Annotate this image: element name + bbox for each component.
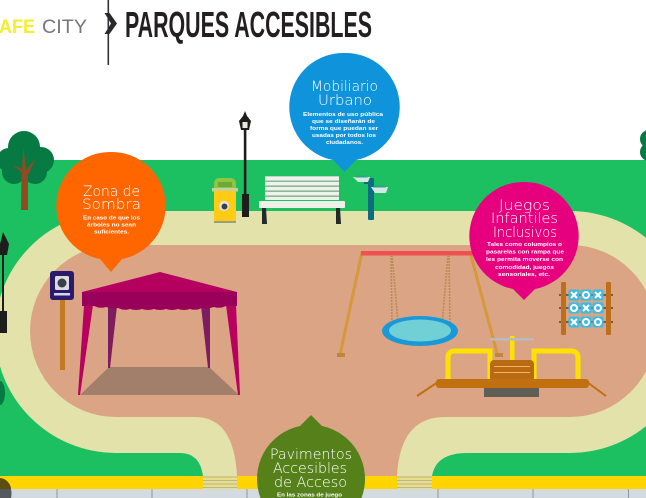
callout body: [83, 216, 140, 236]
callout heading: [82, 184, 141, 213]
lamp post centre: [239, 111, 251, 217]
tree left: [0, 131, 54, 210]
callout body: ciudadanos.: [326, 140, 364, 146]
callout: mobiliario urbano: [289, 53, 400, 172]
callout: zona de sombra: [56, 152, 166, 272]
callout heading: Inclusivos: [493, 225, 557, 241]
callout body: forma que puedan ser: [310, 126, 379, 132]
callout heading: Infantiles: [491, 211, 558, 227]
callout body: En caso de que los: [83, 216, 140, 222]
callout body: [486, 242, 564, 278]
tic tac toe panel: [559, 282, 613, 335]
header: [0, 0, 372, 65]
merry-go-round: [417, 336, 606, 397]
callout: juegos infantiles inclusivos: [469, 182, 579, 300]
callout heading: Sombra: [82, 197, 141, 213]
callout body: suficientes.: [94, 230, 130, 236]
callout heading: Juegos: [499, 198, 550, 214]
swing set: [337, 251, 503, 357]
callout: pavimentos accesibles: [257, 415, 365, 498]
park ground: [30, 245, 646, 476]
lawn: [0, 160, 646, 478]
brand name: AFE: [0, 17, 35, 38]
sidewalk: [0, 476, 646, 498]
parking sign: [50, 271, 74, 370]
callout body: [303, 112, 384, 146]
crossing left: [203, 476, 237, 489]
callout heading: Urbano: [318, 93, 372, 109]
callout heading: Pavimentos: [270, 447, 352, 463]
lamp post left: [0, 232, 9, 333]
callout body: pasarelas con rampa que: [486, 250, 564, 256]
callout heading: Mobiliario: [311, 79, 378, 95]
callout body: les permita moverse con: [486, 257, 564, 263]
callout heading: Zona de: [83, 184, 140, 200]
left shrub: [0, 381, 5, 405]
bench: [259, 176, 345, 224]
callout body: que se diseñarán de: [312, 119, 375, 125]
crossing right: [397, 476, 432, 489]
drinking fountain: [353, 176, 388, 220]
path ring: [0, 211, 646, 489]
header divider with chevron: [104, 0, 117, 65]
brand name: CITY: [42, 17, 87, 38]
title: PARQUES ACCESIBLES: [125, 4, 372, 45]
litter bin: [212, 178, 238, 223]
callout body: usadas por todos los: [312, 133, 376, 139]
callout body: Elementos de uso pública: [303, 112, 384, 118]
tree right, cropped: [640, 130, 646, 161]
callout body: Tales como columpios o: [487, 242, 563, 248]
callout heading: [311, 79, 378, 109]
callout body: árboles no sean: [87, 222, 137, 228]
callout heading: [270, 447, 352, 491]
brand name: [0, 17, 87, 38]
shade tent: [78, 272, 240, 395]
corner dark element: [0, 478, 12, 498]
callout heading: [491, 198, 558, 241]
callout body: sensoriales, etc.: [498, 272, 551, 278]
callout body: comodidad, juegos: [495, 265, 554, 271]
callout heading: Accesibles: [273, 461, 347, 477]
callout heading: de Acceso: [274, 475, 347, 491]
